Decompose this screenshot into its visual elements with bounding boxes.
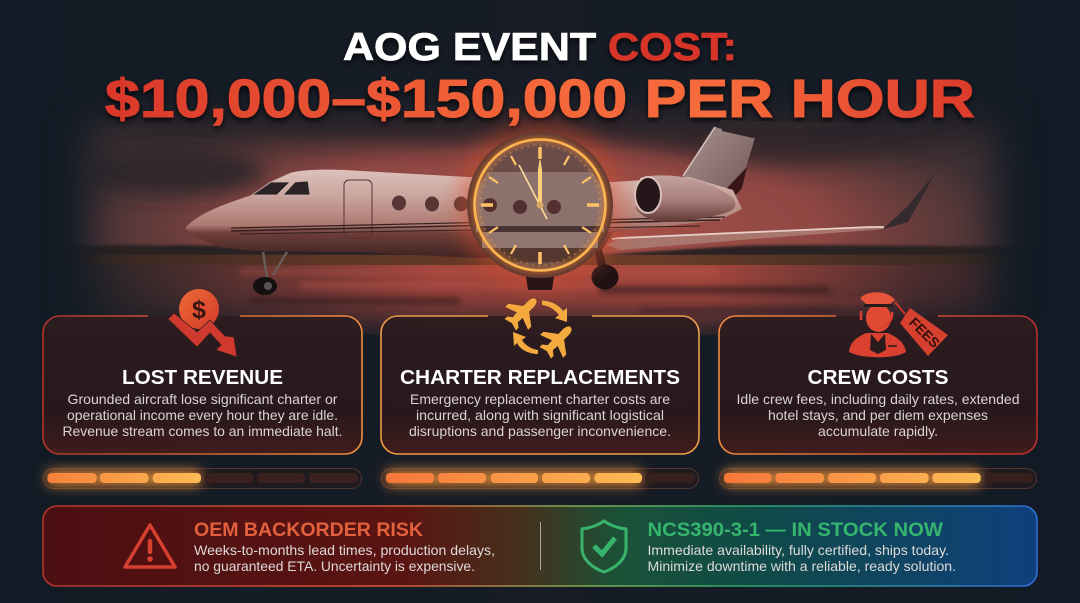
clock glow — [456, 121, 624, 289]
door — [344, 180, 372, 238]
OEM text: no guaranteed ETA. Uncertainty is expensive. — [194, 558, 475, 574]
body text — [736, 391, 1020, 439]
progress bar: crew costs, 5 of 6 — [720, 468, 1036, 488]
body text — [409, 391, 671, 439]
OEM text — [194, 542, 495, 574]
wing — [606, 173, 935, 250]
cockpit windows — [252, 181, 310, 195]
heading: CREW COSTS — [808, 366, 948, 389]
card border — [381, 316, 699, 454]
neon ring — [474, 140, 606, 270]
title — [105, 26, 975, 129]
body text — [62, 391, 342, 439]
nose gear — [253, 252, 287, 295]
heading: CHARTER REPLACEMENTS — [400, 366, 680, 389]
icon: shield check — [582, 521, 626, 572]
icon: crew with fees tag — [849, 292, 948, 357]
body text: hotel stays, and per diem expenses — [768, 407, 988, 423]
heading: LOST REVENUE — [122, 366, 283, 389]
OEM text: Weeks-to-months lead times, production delays, — [194, 542, 495, 558]
body text: Grounded aircraft lose significant charter or — [68, 391, 338, 407]
fuselage — [185, 170, 742, 258]
fuselage stripes — [231, 217, 725, 234]
icon: falling dollar — [168, 289, 237, 357]
panel: lost revenue — [43, 289, 362, 454]
main gear — [592, 250, 618, 290]
private jet — [185, 120, 935, 295]
body text: Revenue stream comes to an immediate halt. — [62, 423, 342, 439]
title line 1: AOG EVENT COST: — [343, 26, 737, 69]
stock text: Minimize downtime with a reliable, ready solution. — [648, 558, 956, 574]
clock — [456, 121, 624, 290]
cabin windows — [392, 196, 561, 214]
panel body — [43, 506, 1037, 586]
panel: crew costs — [719, 292, 1037, 454]
card body — [381, 316, 699, 454]
card body — [43, 316, 362, 454]
divider — [540, 522, 541, 570]
photo: storm sky and wet tarmac — [70, 105, 1014, 335]
icon: falling dollar: $ — [192, 296, 206, 324]
body text: incurred, along with significant logistical — [416, 407, 664, 423]
tail fin — [683, 120, 857, 210]
body text: accumulate rapidly. — [818, 423, 938, 439]
hour marks — [481, 147, 599, 264]
card border — [719, 316, 1037, 454]
card body — [719, 316, 1037, 454]
body text: operational income every hour they are idle. — [67, 407, 338, 423]
title line 2: $10,000–$150,000 PER HOUR — [105, 69, 975, 129]
card border — [43, 316, 362, 454]
panel: charter replacements — [381, 288, 699, 454]
OEM heading: OEM BACKORDER RISK — [194, 520, 423, 541]
clock hands — [519, 160, 547, 219]
body text: Idle crew fees, including daily rates, extended — [736, 391, 1020, 407]
stock text: Immediate availability, fully certified, ships today. — [648, 542, 949, 558]
engine — [635, 175, 735, 222]
body text: disruptions and passenger inconvenience. — [409, 423, 671, 439]
stock text — [648, 542, 956, 574]
body text: Emergency replacement charter costs are — [410, 391, 670, 407]
fees tag: FEES — [906, 314, 943, 351]
panel: OEM risk vs in stock — [43, 506, 1037, 586]
clock stand — [526, 276, 554, 290]
clock body — [467, 132, 613, 278]
icon: warning triangle — [125, 525, 175, 567]
stock heading: NCS390-3-1 — IN STOCK NOW — [648, 520, 943, 541]
progress bar: lost revenue, 3 of 6 — [44, 468, 362, 488]
progress bar: charter replacements, 5 of 6 — [382, 468, 698, 488]
icon: rotating planes — [499, 288, 582, 364]
